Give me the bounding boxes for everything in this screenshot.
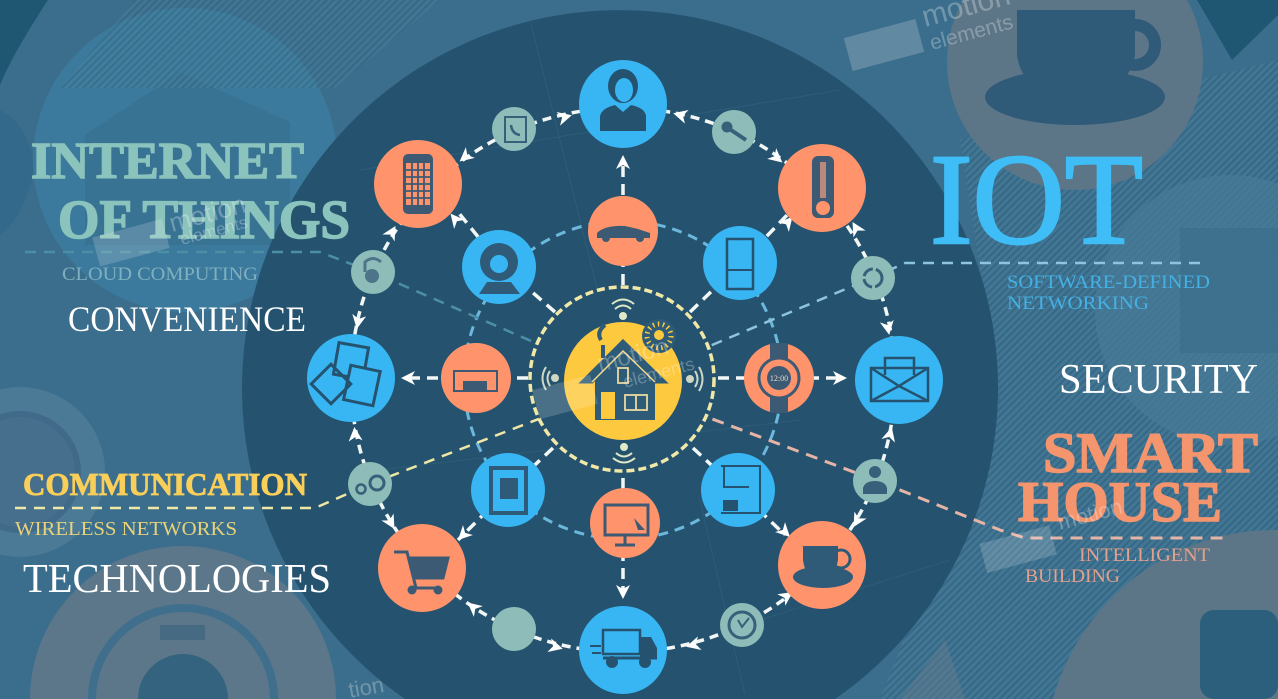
title: internet of things: OF THINGS	[58, 189, 350, 250]
house icon	[582, 325, 665, 420]
inner blue dashed ring	[464, 221, 782, 539]
wifi right	[687, 367, 702, 391]
watermark left: elements	[178, 213, 250, 249]
watermark top right: elements	[927, 11, 1016, 55]
label: software-defined networking	[1007, 272, 1210, 314]
node: refresh	[851, 256, 895, 300]
wifi left	[542, 367, 558, 390]
node: watch: 12:00	[770, 374, 788, 383]
label: technologies: TECHNOLOGIES	[23, 555, 331, 601]
hub dashed ring	[530, 287, 714, 471]
node: coffee cup	[778, 521, 866, 609]
wifi bottom	[613, 444, 635, 462]
node: address book	[492, 107, 536, 151]
house circle	[564, 322, 682, 440]
node: tablets	[307, 334, 395, 422]
title: internet of things	[31, 133, 350, 250]
node: car	[588, 196, 658, 266]
title: smart house	[1018, 422, 1258, 534]
node: fridge	[703, 226, 777, 300]
label: intelligent building: INTELLIGENT	[1079, 545, 1210, 566]
hub: smart home	[530, 287, 714, 471]
watermark left: motion	[166, 189, 249, 238]
node: clock	[720, 603, 764, 647]
label: software-defined networking: NETWORKING	[1007, 293, 1149, 314]
radial white spokes	[408, 163, 840, 595]
node: person	[579, 60, 667, 148]
title: IOT: IOT	[930, 128, 1143, 272]
title: internet of things: INTERNET	[31, 133, 304, 190]
watermark center: elements	[621, 354, 697, 392]
node: padlock	[351, 250, 395, 294]
watermark bottom right	[980, 494, 1125, 573]
node: gears	[348, 462, 392, 506]
watermark top right	[844, 0, 1016, 71]
title: smart house: HOUSE	[1018, 471, 1222, 534]
label: intelligent building	[1025, 545, 1210, 587]
label: intelligent building: BUILDING	[1025, 566, 1120, 587]
node: watch	[744, 343, 814, 413]
node: phone	[374, 140, 462, 228]
label: security: SECURITY	[1059, 357, 1258, 403]
outer white dashed ring	[351, 108, 895, 652]
watermark center	[532, 333, 697, 419]
node: cart	[378, 524, 466, 612]
node: coffee machine	[701, 453, 775, 527]
label: cloud computing: CLOUD COMPUTING	[62, 264, 258, 285]
wifi top	[612, 300, 634, 319]
dashed leader: communication	[15, 405, 575, 508]
node: empty	[492, 607, 536, 651]
title: smart house: SMART	[1043, 422, 1258, 485]
node: thermometer	[778, 144, 866, 232]
node: monitor	[590, 488, 660, 558]
connector lines	[15, 106, 1225, 656]
watermark bottom right: motion	[1055, 494, 1125, 535]
watermark left	[92, 189, 250, 267]
spoke arrowheads	[347, 106, 899, 656]
node: printer	[441, 343, 511, 413]
faint guide lines	[360, 20, 950, 695]
node: key	[712, 110, 756, 154]
node: man	[853, 459, 897, 503]
node: tablet clip	[471, 453, 545, 527]
dashed leader: smart house	[675, 405, 1225, 538]
label: wireless networks: WIRELESS NETWORKS	[15, 518, 237, 540]
label: convenience: CONVENIENCE	[68, 299, 306, 339]
dashed leader: internet of things	[25, 252, 575, 360]
dashed leader: IoT	[700, 263, 1200, 350]
node: delivery truck	[579, 606, 667, 694]
watermark center: motion	[595, 333, 671, 378]
bulb icon	[642, 319, 676, 353]
central dark circle	[242, 10, 998, 699]
node: envelope	[855, 336, 943, 424]
label: software-defined networking: SOFTWARE-DEFINED	[1007, 272, 1210, 293]
node: webcam	[462, 230, 536, 304]
heading: communication: COMMUNICATION	[23, 466, 307, 502]
